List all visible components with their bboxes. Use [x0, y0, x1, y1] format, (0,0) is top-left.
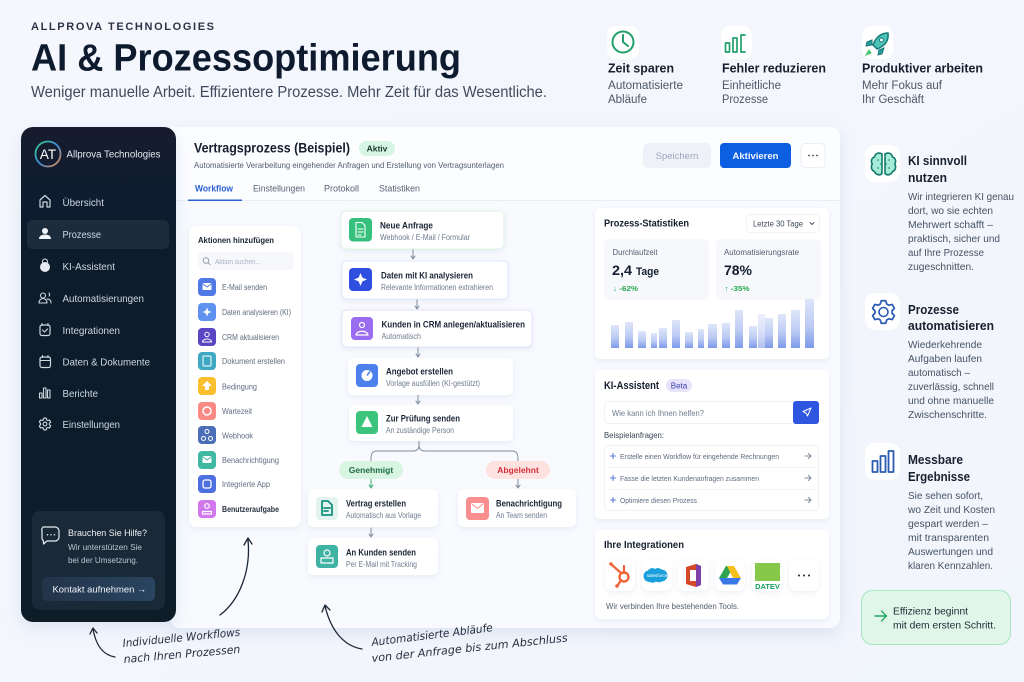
benefit: Zeit sparen: Automatisierte	[608, 80, 683, 92]
sidebar	[21, 127, 176, 622]
stat: Automatisierungsrate: Automatisierungsrate	[724, 248, 800, 257]
action: Wartezeit: Wartezeit	[222, 407, 253, 416]
header buttons	[643, 143, 825, 168]
annotation: automated flows: von der Anfrage bis zum Abschluss	[371, 631, 569, 665]
workflow step: Angebot erstellen	[348, 358, 513, 395]
logo: Office	[678, 560, 709, 591]
nav: KI-Assistent: KI-Assistent	[62, 261, 115, 273]
action: Daten analysieren	[198, 303, 291, 321]
benefit: Zeit sparen: Abläufe	[608, 94, 647, 106]
action: Integrierte App	[198, 475, 270, 493]
callout	[862, 590, 1010, 644]
action: Wartezeit	[198, 402, 253, 420]
button: Speichern	[643, 143, 711, 168]
action: Webhook	[198, 426, 254, 444]
action: Benutzeraufgabe	[198, 500, 279, 518]
stat: Durchlaufzeit	[604, 239, 709, 300]
right column: Messbare Ergebnisse: gespart werden –	[908, 518, 988, 530]
logo: DATEV	[752, 560, 782, 591]
nav: Prozesse: Prozesse	[62, 229, 101, 241]
active nav highlight	[27, 220, 169, 249]
workflow connectors	[369, 249, 520, 537]
main content panel	[170, 127, 840, 628]
action: Dokument erstellen: Dokument erstellen	[222, 357, 285, 366]
benefit: Produktiver arbeiten: Ihr Geschäft	[862, 94, 925, 106]
icon: brain	[865, 145, 900, 182]
tabs: Workflow	[195, 184, 234, 194]
action: Benachrichtigung: Benachrichtigung	[222, 456, 279, 465]
nav: Berichte	[40, 388, 98, 400]
logo	[36, 142, 160, 166]
stat: Durchlaufzeit: 2,4	[612, 262, 632, 278]
tabs: Protokoll	[324, 184, 359, 194]
panel: actions	[189, 226, 301, 527]
action: Benachrichtigung	[198, 451, 279, 469]
right column: Messbare Ergebnisse: wo Zeit und Kosten	[907, 504, 995, 516]
workflow step: Neue Anfrage: Neue Anfrage	[380, 220, 433, 230]
right column: Messbare Ergebnisse	[865, 443, 995, 572]
process header: Automatisierte Verarbeitung eingehender Anfragen und Erstellung von Vertragsunterlagen	[194, 160, 504, 170]
panel: KI-Assistent: KI-Assistent	[604, 380, 659, 392]
right column: KI sinnvoll nutzen: Mehrwert schafft –	[908, 219, 993, 231]
branch label: Genehmigt	[339, 461, 403, 479]
workflow step: Zur Prüfung senden: An zuständige Person	[386, 426, 454, 435]
process header	[194, 140, 504, 170]
panel: KI-Assistent: Beispielanfragen:	[604, 430, 664, 440]
icon: clock	[607, 26, 639, 59]
nav: Automatisierungen: Automatisierungen	[62, 293, 144, 305]
arrow: to actions panel	[220, 538, 252, 615]
chat input: Wie kann ich Ihnen helfen?	[612, 408, 704, 418]
arrow: to workflow	[322, 605, 362, 649]
right column: Messbare Ergebnisse: Messbare	[908, 453, 963, 467]
right column: KI sinnvoll nutzen: Wir integrieren KI genau	[908, 191, 1014, 203]
workflow step: An Kunden senden: An Kunden senden	[346, 548, 416, 558]
stat: Automatisierungsrate	[716, 239, 821, 300]
panel: actions: Aktionen hinzufügen	[198, 235, 274, 245]
right column: Prozesse automatisieren: Aufgaben laufen	[908, 353, 982, 365]
icon: bars	[721, 26, 752, 59]
logo: Salesforce	[642, 560, 672, 591]
workflow step: Zur Prüfung senden: Zur Prüfung senden	[386, 414, 460, 424]
bar chart	[611, 299, 814, 348]
workflow step: Daten mit KI analysieren: Daten mit KI analysieren	[381, 270, 473, 280]
benefit: Produktiver arbeiten	[862, 26, 983, 106]
action: Benutzeraufgabe: Benutzeraufgabe	[222, 505, 279, 514]
example prompts: Optimiere diesen Prozess	[620, 496, 697, 505]
right column: KI sinnvoll nutzen: zugeschnitten.	[908, 261, 974, 273]
right column: Prozesse automatisieren: zuverlässig, schnell	[908, 381, 994, 393]
stat: Durchlaufzeit: Tage	[636, 266, 659, 278]
action: E-Mail senden	[198, 278, 267, 296]
action: Bedingung	[198, 377, 257, 395]
nav: Einstellungen: Einstellungen	[62, 419, 120, 431]
right column: Messbare Ergebnisse: klaren Kennzahlen.	[908, 560, 993, 572]
benefit: Zeit sparen	[607, 26, 683, 106]
benefit: Fehler reduzieren: Fehler reduzieren	[722, 60, 826, 76]
panel: Integrationen: Ihre Integrationen	[604, 539, 684, 551]
workflow step: Vertrag erstellen: Automatisch aus Vorlage	[346, 511, 421, 520]
benefit: Produktiver arbeiten: Mehr Fokus auf	[862, 80, 943, 92]
panel: KI-Assistent	[595, 370, 829, 519]
right column: KI sinnvoll nutzen: KI sinnvoll	[908, 154, 967, 168]
right column: KI sinnvoll nutzen	[865, 145, 1014, 273]
stat: Automatisierungsrate: 78%	[724, 262, 753, 278]
stat: Automatisierungsrate: ↑ -35%	[724, 284, 750, 293]
eyebrow brand name: ALLPROVA TECHNOLOGIES	[31, 21, 214, 33]
button: Aktivieren	[720, 143, 791, 168]
right column: Prozesse automatisieren: und ohne manuelle	[908, 395, 994, 407]
tabs: Einstellungen	[253, 184, 305, 194]
workflow step: Vertrag erstellen	[308, 489, 438, 527]
benefit: Zeit sparen: Zeit sparen	[608, 60, 674, 76]
more integrations	[789, 560, 819, 591]
annotation: workflows: Individuelle Workflows	[122, 626, 241, 650]
workflow step: Kunden in CRM: Kunden in CRM anlegen/aktualisieren	[382, 320, 525, 330]
right column: Prozesse automatisieren	[865, 293, 994, 421]
panel: Integrationen: Wir verbinden Ihre bestehenden Tools.	[606, 601, 739, 611]
action: E-Mail senden: E-Mail senden	[222, 283, 267, 292]
callout: mit dem ersten Schritt.	[893, 620, 996, 632]
right column: KI sinnvoll nutzen: nutzen	[908, 171, 947, 185]
subtitle: Weniger manuelle Arbeit. Effizientere Prozesse. Mehr Zeit für das Wesentliche.	[31, 84, 547, 101]
arrow: to sidebar	[90, 628, 115, 657]
app window	[21, 127, 840, 628]
workflow step: Daten mit KI analysieren	[342, 261, 508, 299]
logo: DATEV: DATEV	[755, 582, 780, 591]
branch label: Abgelehnt	[486, 461, 550, 479]
workflow step: Angebot erstellen: Vorlage ausfüllen (KI-gestützt)	[386, 379, 480, 388]
help box: Wir unterstützen Sie	[68, 542, 142, 552]
right column: Messbare Ergebnisse: Auswertungen und	[908, 546, 993, 558]
tabs	[188, 184, 420, 201]
stat: Durchlaufzeit: Durchlaufzeit	[612, 248, 658, 257]
process header: Vertragsprozess (Beispiel)	[194, 140, 350, 156]
right column: Messbare Ergebnisse: Ergebnisse	[908, 470, 970, 484]
workflow step: Benachrichtigung: Benachrichtigung	[496, 498, 562, 508]
nav: Berichte: Berichte	[62, 388, 98, 400]
action: CRM aktualisieren	[198, 328, 279, 346]
callout: Effizienz beginnt	[893, 606, 968, 618]
panel: Prozess-Statistiken: Prozess-Statistiken	[604, 218, 689, 230]
status badge	[359, 141, 395, 156]
workflow step: Neue Anfrage	[341, 211, 504, 249]
app header background	[170, 127, 840, 200]
button: more	[801, 144, 825, 168]
date range dropdown	[746, 214, 820, 232]
nav: Daten & Dokumente: Daten & Dokumente	[62, 356, 150, 368]
action: Dokument erstellen	[198, 352, 285, 370]
icon: bar chart	[865, 443, 900, 480]
stat: Durchlaufzeit: ↓ -62%	[613, 284, 638, 293]
workflow step: Benachrichtigung: An Team senden	[496, 511, 547, 520]
right column: Prozesse automatisieren: automatisieren	[908, 319, 994, 333]
header: brand and title	[31, 21, 547, 101]
right column: Messbare Ergebnisse: Sie sehen sofort,	[908, 490, 983, 502]
benefit: Produktiver arbeiten: Produktiver arbeiten	[862, 60, 983, 76]
right column: KI sinnvoll nutzen: dort, wo sie echten	[908, 205, 993, 217]
arrow icon	[875, 611, 886, 621]
right column: KI sinnvoll nutzen: praktisch, sicher und	[908, 233, 1000, 245]
action: Integrierte App: Integrierte App	[222, 480, 270, 489]
workflow step: Benachrichtigung	[458, 489, 576, 527]
nav: Integrationen	[40, 324, 120, 337]
right column: Prozesse automatisieren: Zwischenschritte.	[908, 409, 987, 421]
branch label: Abgelehnt: Abgelehnt	[497, 465, 539, 475]
logo: Salesforce: salesforce	[647, 573, 668, 578]
panel: Integrationen	[595, 530, 829, 619]
workflow step: Kunden in CRM	[342, 310, 532, 347]
branch label: Genehmigt: Genehmigt	[349, 465, 393, 475]
action: Webhook: Webhook	[222, 432, 254, 440]
annotation: automated flows: Automatisierte Abläufe	[370, 621, 494, 649]
right column: Messbare Ergebnisse: mit transparenten	[908, 532, 989, 544]
workflow step: Neue Anfrage: Webhook / E-Mail / Formular	[380, 233, 470, 242]
search field: Aktion suchen...	[215, 259, 261, 266]
help box: Brauchen Sie Hilfe?	[68, 528, 147, 539]
panel: Prozess-Statistiken	[595, 208, 829, 359]
nav: Daten & Dokumente	[40, 356, 150, 368]
beta badge	[666, 379, 692, 392]
status badge: Aktiv	[367, 144, 388, 154]
search field	[198, 252, 294, 270]
logo: AT	[40, 147, 56, 162]
right column: Prozesse automatisieren: Wiederkehrende	[908, 339, 982, 351]
nav: Übersicht	[40, 196, 104, 209]
example prompts: Erstelle einen Workflow für eingehende Rechnungen	[620, 452, 779, 461]
nav: Einstellungen	[39, 418, 120, 431]
beta badge: Beta	[671, 382, 688, 390]
button: Speichern: Speichern	[656, 151, 698, 162]
logo: HubSpot	[605, 560, 635, 591]
chat input	[604, 401, 819, 424]
workflow step: Kunden in CRM: Automatisch	[382, 332, 421, 341]
benefit: Fehler reduzieren	[721, 26, 826, 106]
workflow step: Vertrag erstellen: Vertrag erstellen	[346, 498, 406, 508]
nav: Integrationen: Integrationen	[62, 325, 120, 337]
help box	[32, 511, 165, 610]
contact button: Kontakt aufnehmen →	[52, 584, 146, 596]
workflow step: Angebot erstellen: Angebot erstellen	[386, 366, 453, 376]
workflow step: Daten mit KI analysieren: Relevante Informationen extrahieren	[381, 283, 493, 292]
annotation: workflows: nach Ihren Prozessen	[123, 643, 241, 666]
action: CRM aktualisieren: CRM aktualisieren	[222, 333, 279, 342]
action: Daten analysieren: Daten analysieren (KI)	[222, 308, 291, 317]
tabs: Statistiken	[379, 184, 420, 194]
icon: rocket	[862, 26, 893, 59]
annotation: workflows	[122, 626, 241, 666]
icon: gear	[865, 293, 900, 330]
example prompts	[604, 446, 818, 510]
benefit: Fehler reduzieren: Einheitliche	[722, 80, 781, 92]
workflow step: Zur Prüfung senden	[349, 405, 513, 441]
right column: Prozesse automatisieren: automatisch –	[908, 367, 970, 379]
logo: Allprova Technologies	[66, 150, 160, 160]
nav: Prozesse	[39, 228, 101, 241]
example prompts: Fasse die letzten Kundenanfragen zusammen	[620, 474, 759, 483]
right column: KI sinnvoll nutzen: auf Ihre Prozesse	[908, 247, 984, 259]
main title: AI & Prozessoptimierung	[31, 38, 461, 80]
workflow step: An Kunden senden: Per E-Mail mit Tracking	[346, 560, 417, 569]
help box: bei der Umsetzung.	[68, 555, 138, 565]
nav: Übersicht: Übersicht	[62, 197, 104, 209]
icon: chat bubble	[42, 527, 59, 544]
nav: KI-Assistent	[40, 259, 115, 273]
benefit: Fehler reduzieren: Prozesse	[722, 94, 768, 106]
logo: Google Drive	[715, 560, 745, 591]
workflow step: An Kunden senden	[308, 538, 438, 575]
date range dropdown: Letzte 30 Tage	[753, 220, 804, 228]
action: Bedingung: Bedingung	[222, 382, 257, 392]
right column: Prozesse automatisieren: Prozesse	[908, 303, 959, 317]
button: Aktivieren: Aktivieren	[733, 151, 779, 162]
